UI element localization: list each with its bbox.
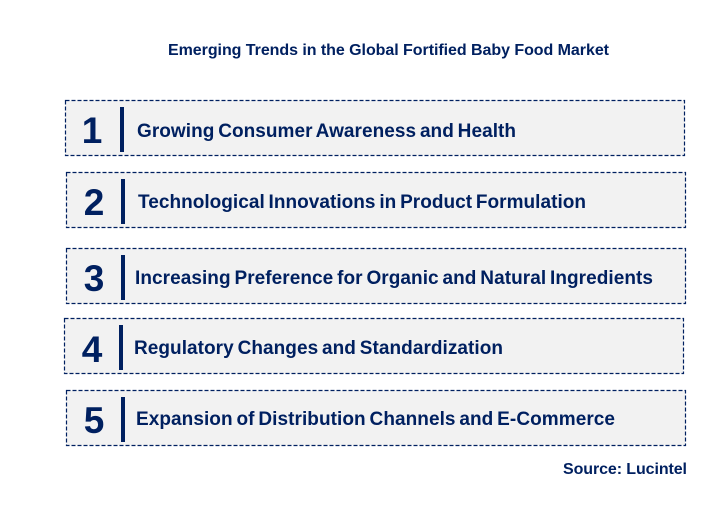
label 2: Technological Innovations in Product Formulation [138,192,586,213]
label 3: Increasing Preference for Organic and Natural Ingredients [135,268,653,289]
number 2: 2 [84,182,104,223]
panel: trend 1 [66,100,684,156]
divider bar 4 [119,325,123,370]
number 5: 5 [84,400,104,441]
number 1: 1 [82,110,102,151]
panel: trend 4 [64,318,684,374]
label 1: Growing Consumer Awareness and Health [137,121,516,142]
divider bar 5 [121,397,125,442]
divider bar 1 [120,107,124,152]
number 4: 4 [82,329,103,370]
panel: trend 3 [66,248,686,304]
label 4: Regulatory Changes and Standardization [134,338,503,359]
panel: trend 2 [66,172,686,228]
title: Emerging Trends in the Global Fortified Baby Food Market [168,42,610,59]
source: Source: Lucintel [563,461,687,478]
divider bar 2 [121,179,125,224]
panel: trend 5 [66,390,686,446]
divider bar 3 [121,255,125,300]
number 3: 3 [84,258,104,299]
label 5: Expansion of Distribution Channels and E-Commerce [136,409,615,430]
